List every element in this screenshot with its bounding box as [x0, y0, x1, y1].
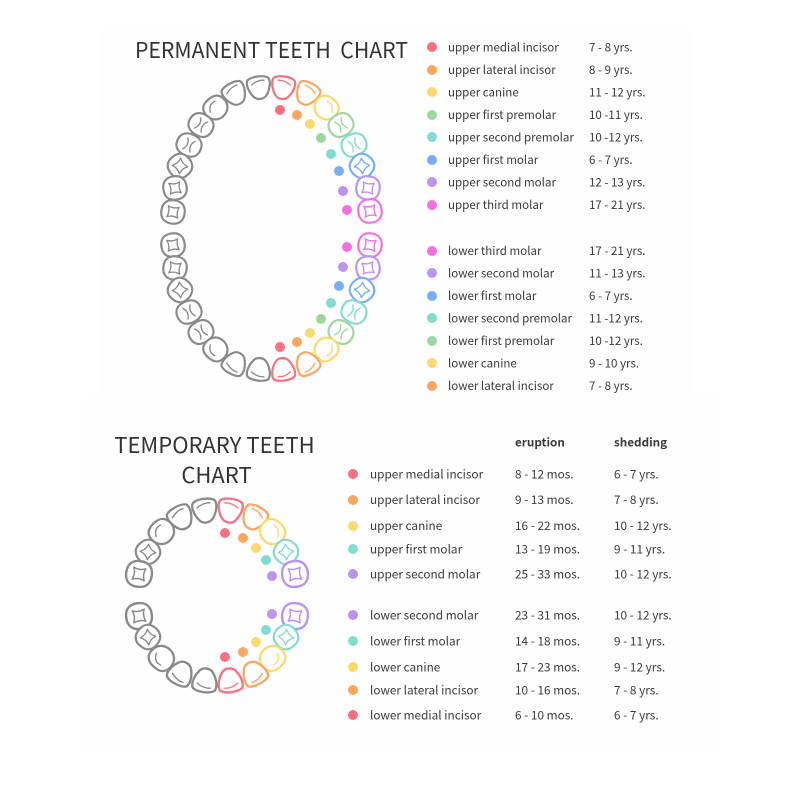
- row: lower medial incisor: 6 - 7 yrs.: [614, 706, 659, 724]
- tooth: lower left lateral incisor: [219, 348, 250, 379]
- row: lower canine: [427, 356, 639, 372]
- row: upper first molar: upper first molar: [448, 152, 539, 168]
- row: upper first molar: upper first molar: [370, 540, 463, 558]
- tooth: lower left canine: [199, 333, 232, 366]
- row: upper medial incisor: 7 - 8 yrs.: [589, 40, 633, 56]
- tooth: upper first molar: [346, 150, 378, 182]
- tooth: upper first molar: [270, 536, 302, 568]
- row: lower medial incisor: lower medial incisor: [370, 706, 482, 724]
- row: upper first premolar: [427, 107, 643, 123]
- tooth: lower second molar: [355, 255, 381, 281]
- row: upper second molar: upper second molar: [370, 566, 481, 582]
- tooth: lower left second molar: [162, 255, 188, 281]
- row: upper lateral incisor: [427, 62, 633, 78]
- row: lower second premolar: [427, 310, 643, 326]
- column heading: shedding: shedding: [614, 434, 667, 450]
- row: upper third molar: 17 - 21 yrs.: [589, 197, 645, 213]
- permanent arch: position dots: [275, 105, 352, 352]
- row: upper first premolar: 10 -11 yrs.: [589, 107, 643, 123]
- panel: temporary teeth: [85, 395, 720, 751]
- panel: permanent teeth: [100, 30, 692, 395]
- row: upper canine: 11 - 12 yrs.: [589, 84, 645, 100]
- row: lower lateral incisor: 10 - 16 mos.: [515, 682, 580, 698]
- row: lower canine: lower canine: [370, 658, 441, 676]
- tooth: upper canine: [310, 91, 343, 124]
- tooth: upper medial incisor: [270, 75, 296, 100]
- row: lower medial incisor: [348, 706, 659, 724]
- tooth: upper left canine: [145, 515, 179, 549]
- row: upper lateral incisor: 9 - 13 mos.: [515, 491, 574, 508]
- row: lower lateral incisor: lower lateral incisor: [448, 378, 554, 394]
- column heading: eruption: eruption: [515, 434, 565, 450]
- row: upper second molar: [427, 174, 645, 190]
- tooth: upper left second premolar: [173, 130, 205, 160]
- tooth: lower left first premolar: [185, 316, 217, 348]
- temporary arch: grey left teeth: [124, 497, 219, 694]
- tooth: upper left canine: [199, 91, 232, 124]
- tooth: lower left medial incisor: [191, 667, 219, 694]
- row: lower medial incisor: 6 - 10 mos.: [515, 706, 574, 724]
- row: lower canine: lower canine: [448, 356, 517, 372]
- row: upper first molar: [427, 152, 633, 168]
- tooth: lower first premolar: [325, 316, 357, 348]
- tooth: upper left lateral incisor: [219, 78, 250, 109]
- row: lower first molar: 6 - 7 yrs.: [589, 288, 633, 304]
- tooth: lower canine: [255, 641, 289, 675]
- row: upper canine: upper canine: [370, 517, 443, 534]
- tooth: lower third molar: [357, 232, 383, 258]
- tooth: lower left first molar: [132, 621, 164, 653]
- row: upper third molar: [427, 197, 645, 213]
- row: upper canine: upper canine: [448, 84, 519, 100]
- tooth: upper first premolar: [325, 109, 357, 141]
- row: upper canine: 10 - 12 yrs.: [614, 517, 672, 534]
- row: lower first molar: 14 - 18 mos.: [515, 632, 580, 650]
- tooth: upper left second molar: [124, 559, 154, 589]
- row: lower second molar: lower second molar: [448, 266, 555, 282]
- row: lower second molar: 10 - 12 yrs.: [614, 606, 672, 624]
- row: lower second molar: lower second molar: [370, 606, 479, 624]
- tooth: lower lateral incisor: [238, 657, 270, 689]
- tooth: lower left second premolar: [173, 297, 205, 327]
- row: lower second premolar: lower second premolar: [448, 310, 572, 326]
- row: upper lateral incisor: 8 - 9 yrs.: [589, 62, 633, 78]
- row: upper second molar: 10 - 12 yrs.: [614, 566, 672, 582]
- row: upper second molar: 25 - 33 mos.: [515, 566, 580, 582]
- tooth: upper canine: [255, 515, 289, 549]
- row: lower first premolar: lower first premolar: [448, 333, 555, 349]
- row: lower canine: 9 - 10 yrs.: [589, 356, 639, 372]
- tooth: upper medial incisor: [216, 497, 244, 524]
- row: lower canine: [348, 658, 665, 676]
- tooth: lower left first molar: [164, 274, 196, 306]
- row: upper second premolar: [427, 130, 643, 146]
- row: lower first premolar: 10 -12 yrs.: [589, 333, 643, 349]
- row: lower canine: 17 - 23 mos.: [515, 658, 580, 676]
- tooth: upper second molar: [355, 175, 381, 201]
- title: temporary teeth chart: TEMPORARY TEETH: [114, 428, 315, 460]
- row: lower second molar: 23 - 31 mos.: [515, 606, 580, 624]
- row: lower second molar: [427, 266, 645, 282]
- tooth: upper third molar: [357, 198, 383, 224]
- tooth: upper left first molar: [164, 150, 196, 182]
- row: upper medial incisor: upper medial incisor: [370, 466, 484, 482]
- row: upper second molar: 12 - 13 yrs.: [589, 174, 645, 190]
- tooth: lower lateral incisor: [292, 348, 323, 379]
- tooth: lower medial incisor: [270, 357, 296, 382]
- permanent arch: coloured right teeth: [270, 75, 383, 382]
- row: lower second premolar: 11 -12 yrs.: [589, 310, 643, 326]
- title: temporary teeth chart: CHART: [181, 458, 252, 490]
- tooth: lower medial incisor: [216, 667, 244, 694]
- row: lower first molar: lower first molar: [370, 632, 461, 650]
- tooth: upper left second molar: [162, 175, 188, 201]
- row: upper medial incisor: [348, 466, 659, 482]
- row: upper first premolar: upper first premolar: [448, 107, 557, 123]
- tooth: upper lateral incisor: [292, 78, 323, 109]
- row: lower first molar: [348, 632, 665, 650]
- tooth: lower second premolar: [338, 297, 370, 327]
- row: upper third molar: upper third molar: [448, 197, 544, 213]
- title: temporary teeth chart: [114, 428, 315, 490]
- tooth: upper left medial incisor: [191, 497, 219, 524]
- row: lower lateral incisor: 7 - 8 yrs.: [589, 378, 633, 394]
- row: upper second molar: upper second molar: [448, 174, 556, 190]
- row: upper second premolar: 10 -12 yrs.: [589, 130, 643, 146]
- tooth: lower left medial incisor: [246, 357, 272, 382]
- row: upper canine: 16 - 22 mos.: [515, 517, 580, 534]
- tooth: upper left third molar: [160, 199, 186, 225]
- row: upper medial incisor: [427, 40, 633, 56]
- row: upper lateral incisor: upper lateral incisor: [370, 491, 480, 508]
- legend: temporary teeth: [348, 466, 672, 724]
- row: upper medial incisor: 8 - 12 mos.: [515, 466, 574, 482]
- tooth: lower left second molar: [124, 601, 154, 631]
- tooth: upper second premolar: [338, 130, 370, 160]
- row: upper medial incisor: upper medial incisor: [448, 40, 559, 56]
- row: lower second molar: 11 - 13 yrs.: [589, 266, 645, 282]
- tooth: upper second molar: [280, 559, 310, 589]
- row: lower lateral incisor: lower lateral incisor: [370, 682, 479, 698]
- tooth: upper left first molar: [132, 536, 164, 568]
- row: lower lateral incisor: [427, 378, 633, 394]
- row: lower canine: 9 - 12 yrs.: [614, 658, 665, 676]
- tooth: lower left third molar: [160, 232, 186, 258]
- row: lower third molar: lower third molar: [448, 243, 542, 259]
- tooth: lower left canine: [145, 641, 179, 675]
- row: lower lateral incisor: 7 - 8 yrs.: [614, 682, 659, 698]
- row: upper lateral incisor: upper lateral incisor: [448, 62, 556, 78]
- tooth: upper left lateral incisor: [165, 502, 197, 534]
- row: lower second molar: [348, 606, 672, 624]
- legend: permanent teeth: [427, 40, 645, 394]
- row: upper first molar: 6 - 7 yrs.: [589, 152, 633, 168]
- row: upper medial incisor: 6 - 7 yrs.: [614, 466, 659, 482]
- row: lower third molar: [427, 243, 645, 259]
- row: lower first premolar: [427, 333, 643, 349]
- row: upper canine: [348, 517, 672, 534]
- row: lower first molar: 9 - 11 yrs.: [614, 632, 665, 650]
- tooth: lower second molar: [280, 601, 310, 631]
- tooth: upper left medial incisor: [246, 75, 272, 100]
- tooth: lower canine: [310, 333, 343, 366]
- row: upper first molar: 13 - 19 mos.: [515, 540, 580, 558]
- tooth: lower first molar: [346, 274, 378, 306]
- row: upper second molar: [348, 566, 672, 582]
- row: lower third molar: 17 - 21 yrs.: [589, 243, 645, 259]
- row: upper lateral incisor: [348, 491, 659, 508]
- row: upper lateral incisor: 7 - 8 yrs.: [614, 491, 659, 508]
- tooth: lower first molar: [270, 621, 302, 653]
- row: lower lateral incisor: [348, 682, 659, 698]
- row: upper canine: [427, 84, 645, 100]
- row: lower first molar: lower first molar: [448, 288, 537, 304]
- title: permanent teeth chart: PERMANENT TEETH CHART: [135, 33, 408, 65]
- temporary arch: coloured right teeth: [216, 497, 310, 694]
- row: upper first molar: 9 - 11 yrs.: [614, 540, 665, 558]
- row: upper second premolar: upper second premolar: [448, 130, 574, 146]
- tooth: upper left first premolar: [185, 109, 217, 141]
- tooth: upper lateral incisor: [238, 502, 270, 534]
- row: upper first molar: [348, 540, 665, 558]
- temporary arch: position dots: [220, 528, 277, 662]
- row: lower first molar: [427, 288, 633, 304]
- permanent arch: grey left teeth: [160, 75, 272, 382]
- tooth: lower left lateral incisor: [165, 657, 197, 689]
